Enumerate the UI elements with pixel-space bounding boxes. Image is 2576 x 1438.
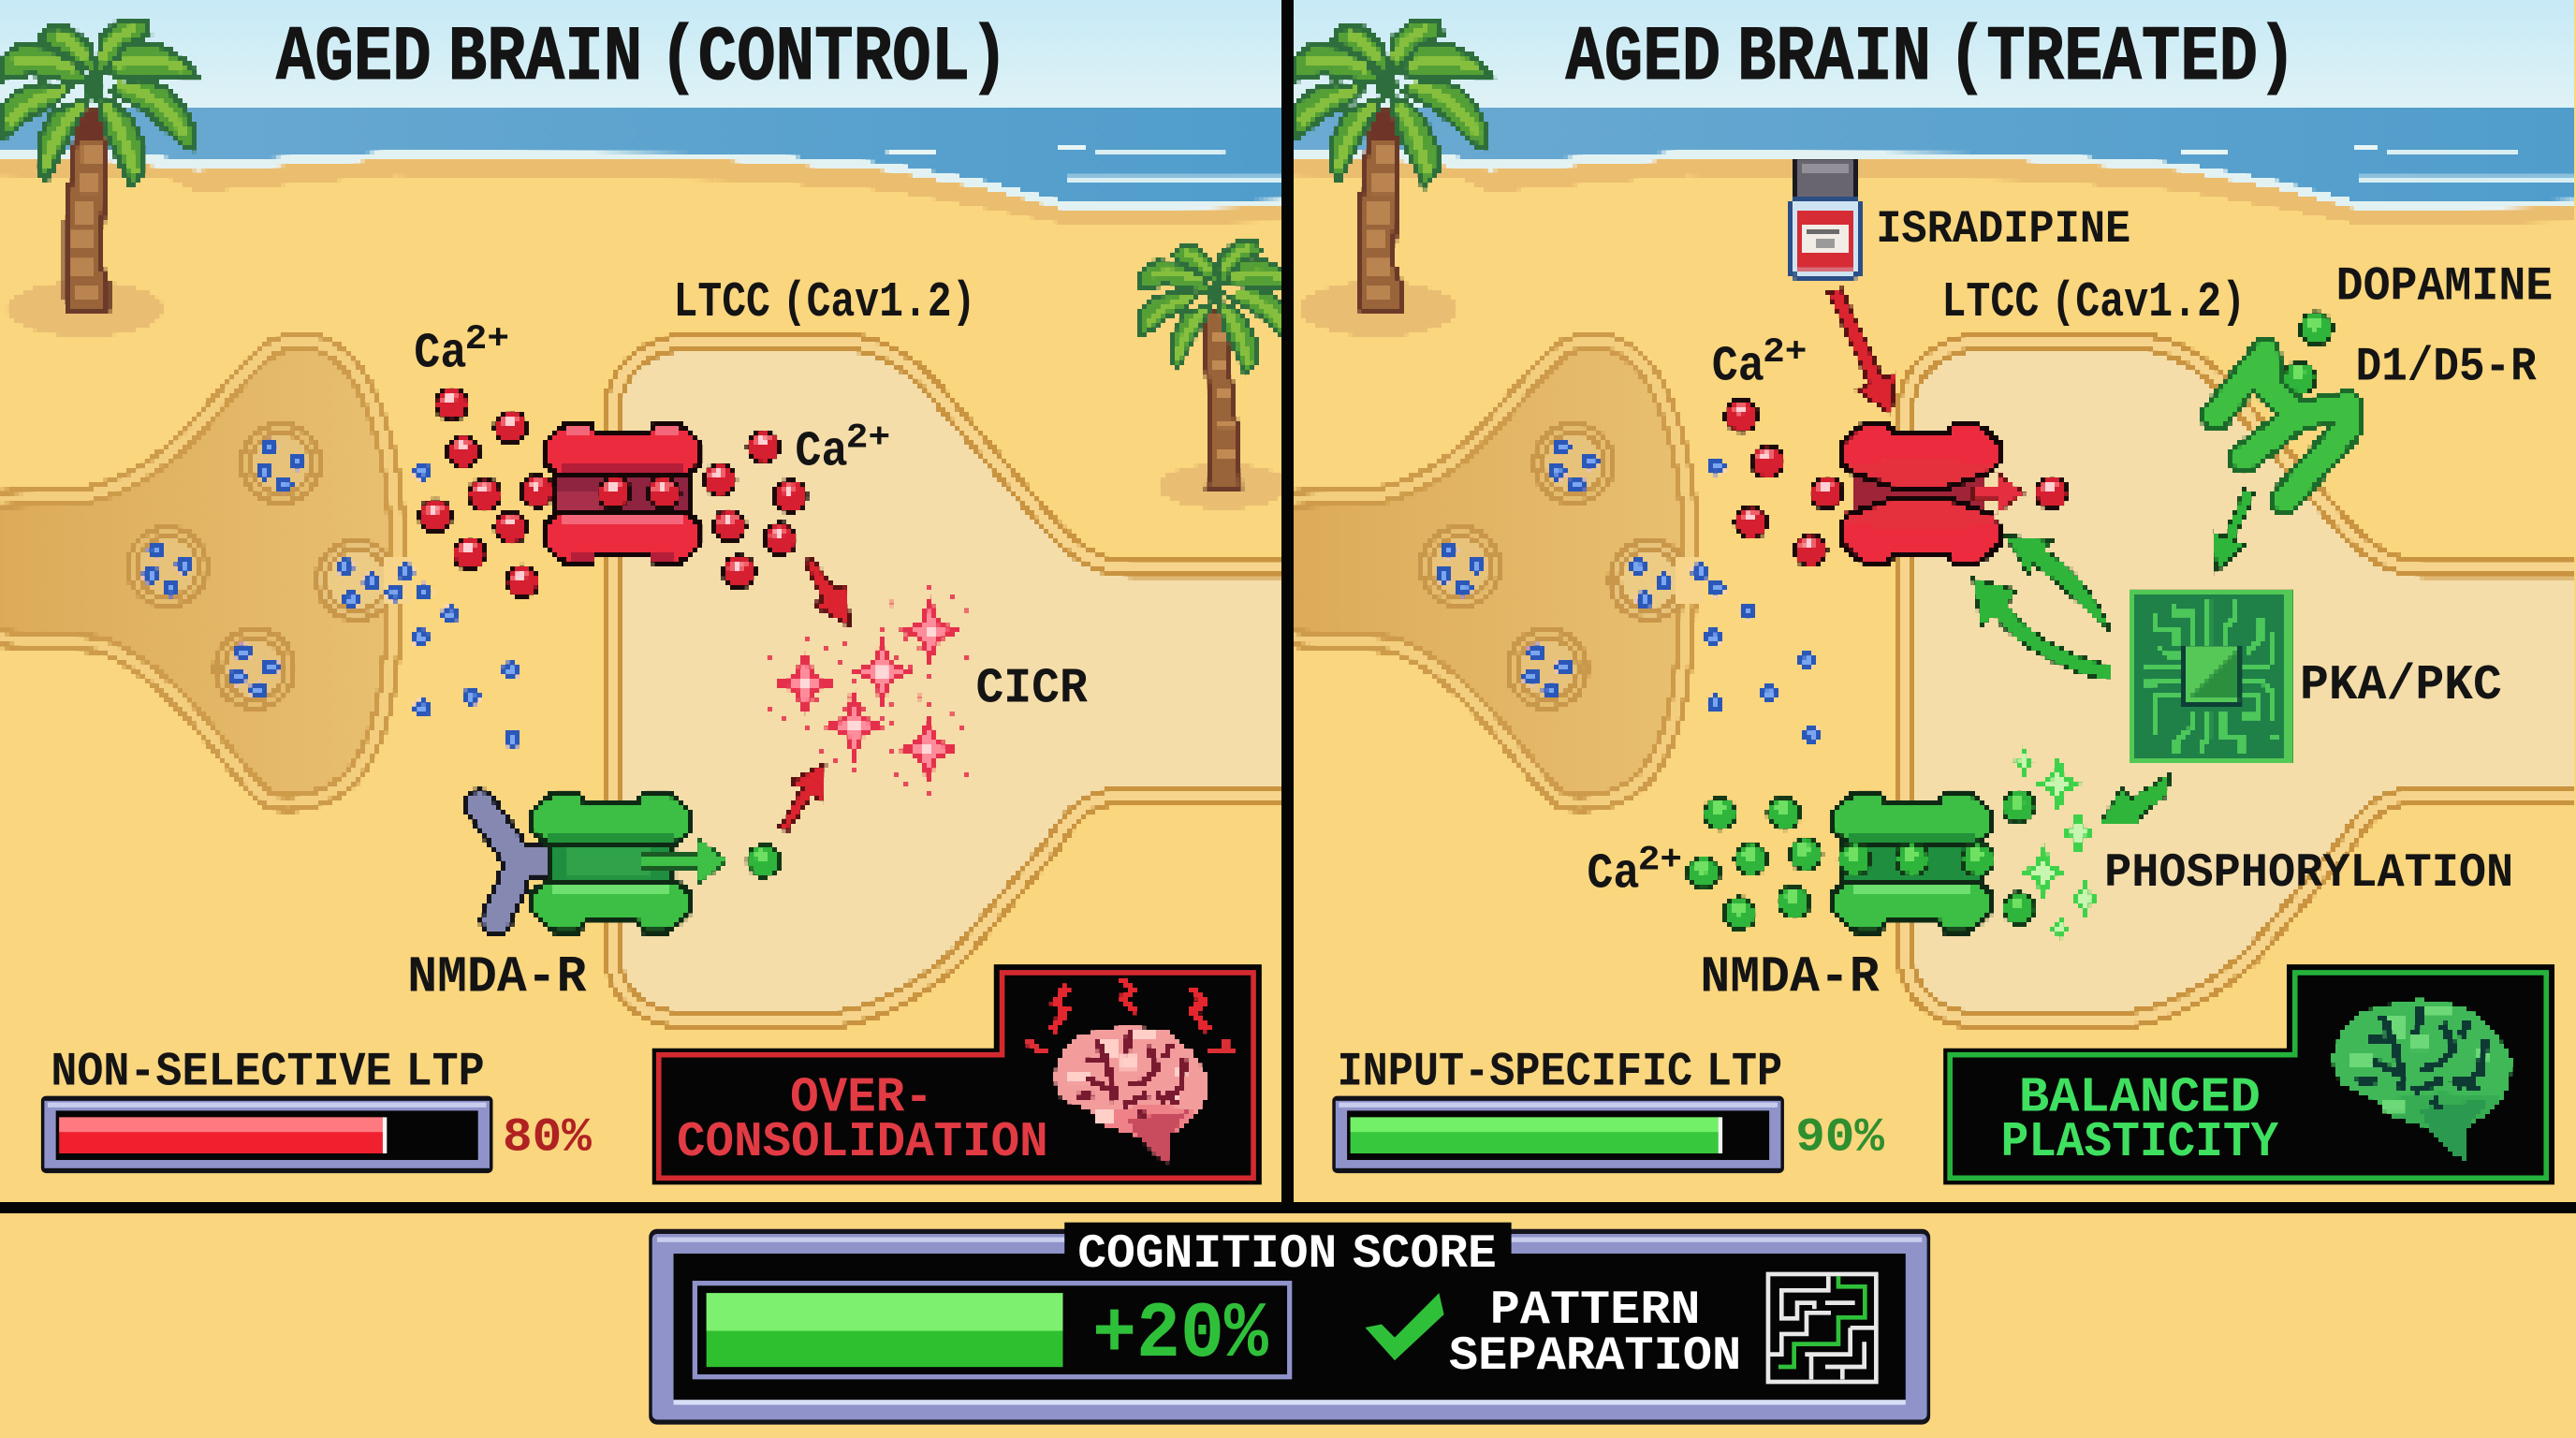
palm tree left bbox=[0, 22, 200, 337]
pattern separation text: PATTERN bbox=[1490, 1284, 1700, 1338]
dopamine molecules bbox=[2282, 311, 2334, 396]
label PKA/PKC: PKA/PKC bbox=[2300, 657, 2502, 713]
callout text: CONSOLIDATION bbox=[677, 1114, 1048, 1170]
LTCC channel bbox=[544, 424, 701, 564]
label isradipine: ISRADIPINE bbox=[1876, 203, 2130, 256]
treated scene artwork bbox=[1277, 0, 2576, 1212]
icon: check mark bbox=[1365, 1293, 1444, 1360]
icon: overloaded brain bbox=[1027, 979, 1236, 1164]
control scene artwork bbox=[0, 0, 1281, 1030]
title control: AGED BRAIN (CONTROL) bbox=[276, 14, 1009, 102]
label CICR: CICR bbox=[975, 660, 1088, 716]
calcium ions treated bbox=[1723, 398, 2070, 568]
value +20%: +20% bbox=[1092, 1291, 1268, 1380]
icon: PKA/PKC chip bbox=[2131, 590, 2290, 761]
small red outflow arrow bbox=[1973, 473, 2024, 513]
feedback arrow lower bbox=[1973, 579, 2111, 681]
green calcium ion bbox=[746, 844, 782, 879]
pattern separation text bbox=[1449, 1284, 1741, 1384]
green calcium ions treated bbox=[1686, 789, 2037, 932]
value 80%: 80% bbox=[503, 1112, 592, 1166]
callout text: OVER- bbox=[790, 1069, 933, 1125]
neurons treated bbox=[1277, 341, 2576, 1020]
callout text balanced: BALANCED bbox=[2019, 1069, 2261, 1125]
HUD title tab: COGNITION SCORE bbox=[1077, 1228, 1497, 1282]
label calcium lower treated: 2+ bbox=[1638, 841, 1682, 880]
label dopamine: DOPAMINE bbox=[2336, 260, 2553, 314]
label NMDA-R: NMDA-R bbox=[407, 949, 587, 1006]
icon: healthy brain bbox=[2331, 999, 2511, 1160]
label LTCC treated: LTCC (Cav1.2) bbox=[1941, 274, 2246, 330]
label calcium upper treated bbox=[1712, 333, 1807, 394]
arrow receptor to kinase bbox=[2213, 490, 2254, 572]
NMDA channel treated bbox=[1834, 792, 1991, 932]
label calcium inner: 2+ bbox=[846, 418, 890, 458]
treated labels and HUD bbox=[1332, 14, 2553, 1181]
cognition gauge bbox=[695, 1284, 1290, 1377]
value 90%: 90% bbox=[1795, 1112, 1884, 1166]
progress bar 80% bbox=[41, 1096, 492, 1173]
neurotransmitter dots bbox=[386, 462, 521, 748]
progress bar 90% bbox=[1332, 1096, 1784, 1173]
label calcium inner bbox=[795, 418, 890, 480]
NMDA receptor with grey ligand bbox=[479, 792, 690, 932]
feedback arrow upper bbox=[2006, 536, 2111, 633]
label non-selective LTP: NON-SELECTIVE LTP bbox=[51, 1046, 485, 1099]
red arrow to CICR bbox=[805, 559, 849, 626]
pattern separation text: SEPARATION bbox=[1449, 1330, 1741, 1384]
palm tree treated bbox=[1293, 22, 1493, 337]
callout: over-consolidation bbox=[655, 968, 1258, 1181]
label input-specific LTP: INPUT-SPECIFIC LTP bbox=[1338, 1046, 1782, 1099]
panel: aged brain treated bbox=[1277, 0, 2576, 1212]
label calcium upper treated: 2+ bbox=[1763, 333, 1808, 373]
callout text balanced bbox=[2001, 1069, 2279, 1170]
label NMDA-R treated: NMDA-R bbox=[1700, 949, 1880, 1006]
phosphorylation sparkles bbox=[2012, 746, 2100, 943]
label calcium inner: Ca bbox=[795, 424, 848, 480]
beach background treated bbox=[1293, 0, 2576, 1212]
red arrow from NMDA ion bbox=[781, 764, 825, 831]
HUD frame bbox=[649, 1229, 1930, 1425]
D1/D5 receptor bbox=[2216, 353, 2348, 500]
label phosphorylation: PHOSPHORYLATION bbox=[2104, 847, 2513, 901]
panel: cognition score HUD bbox=[649, 1223, 1930, 1425]
panel: aged brain control bbox=[0, 0, 1314, 1212]
red inhibitor arrow bbox=[1828, 289, 1895, 414]
callout text balanced: PLASTICITY bbox=[2001, 1114, 2279, 1170]
palm tree right bbox=[1141, 242, 1301, 509]
icon: maze bbox=[1768, 1274, 1876, 1382]
callout: balanced plasticity bbox=[1947, 968, 2552, 1181]
label D1/D5-R: D1/D5-R bbox=[2356, 341, 2537, 394]
label calcium lower treated bbox=[1587, 841, 1682, 902]
calcium ions control bbox=[417, 387, 808, 599]
callout text bbox=[677, 1069, 1048, 1170]
control labels and HUD bbox=[41, 14, 1258, 1181]
label calcium upper treated: Ca bbox=[1712, 338, 1764, 394]
label calcium lower treated: Ca bbox=[1587, 846, 1639, 902]
CICR sparks bbox=[766, 585, 971, 797]
icon: isradipine bottle bbox=[1789, 159, 1861, 278]
neurotransmitter dots treated bbox=[1691, 458, 1821, 743]
title treated: AGED BRAIN (TREATED) bbox=[1566, 14, 2296, 102]
beach background bbox=[0, 0, 1281, 1030]
label calcium upper: 2+ bbox=[465, 320, 509, 360]
label calcium upper bbox=[414, 320, 509, 381]
NMDA outflow arrow bbox=[640, 838, 727, 884]
LTCC channel treated bbox=[1841, 424, 1999, 564]
label LTCC: LTCC (Cav1.2) bbox=[674, 274, 975, 330]
arrow kinase to phosphorylation bbox=[2101, 774, 2170, 823]
neurons: presynaptic and postsynaptic bbox=[0, 341, 1314, 1020]
label calcium upper: Ca bbox=[414, 325, 466, 381]
